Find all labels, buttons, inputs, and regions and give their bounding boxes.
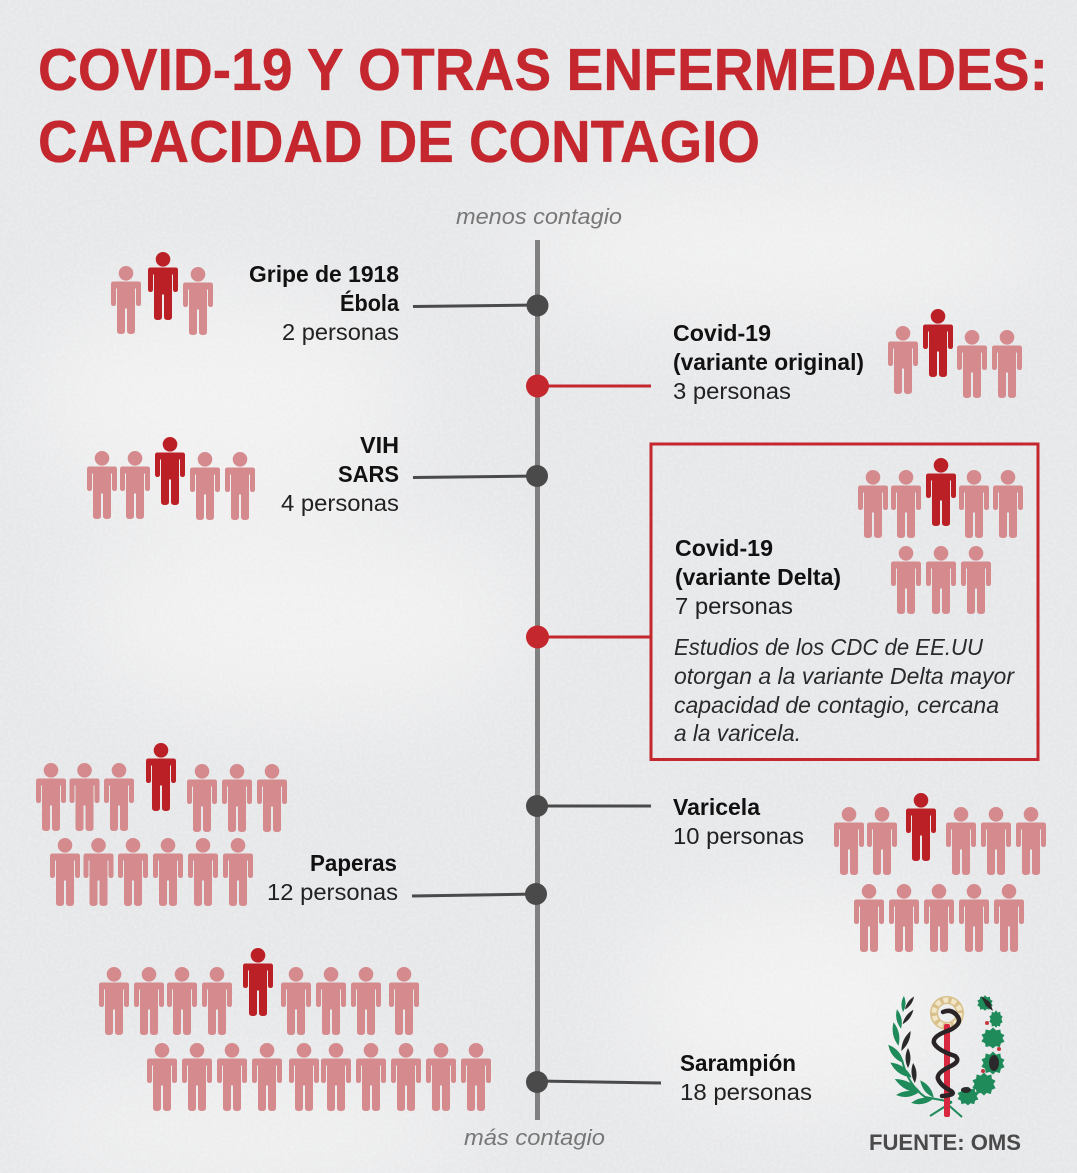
icons: 3 persons [888,309,1022,398]
icons: 18 persons [99,948,491,1111]
timeline axis [535,240,540,1120]
icons: 12 persons [36,743,287,906]
connector and node: Sarampión [526,1071,661,1093]
label: Covid-19 variante Delta: Covid-19 [675,535,773,561]
entry: Sarampión [99,948,812,1111]
label: Gripe de 1918 / Ébola: 2 personas [282,319,399,345]
label: Varicela [673,794,804,849]
icon: medical emblem [886,995,1005,1117]
connector and node: Gripe [413,294,548,316]
connector and node: Paperas [412,883,547,905]
icons: 2 persons [111,252,213,335]
label: Sarampión: Sarampión [680,1050,796,1076]
label: Covid-19 variante Delta [675,535,841,619]
label: Covid-19 variante original: 3 personas [673,378,791,404]
label: Covid-19 variante Delta: 7 personas [675,593,793,619]
icons: 10 persons [834,793,1046,952]
icons: 7 persons [858,458,1023,614]
label: Sarampión: 18 personas [680,1079,812,1105]
panel: Covid-19 variante Delta [526,444,1038,760]
connector and node: Delta [526,626,651,648]
label: VIH / SARS [281,432,399,516]
entry: Gripe de 1918 / Ébola [111,252,548,345]
connector and node: VIH [413,465,548,487]
label: VIH / SARS: SARS [338,461,399,487]
serpent [934,1011,959,1096]
connector and node: Varicela [526,795,651,817]
icons: 4 persons [87,437,255,520]
title: CAPACIDAD DE CONTAGIO [38,109,760,175]
connector and node: original [526,374,651,398]
label: Varicela: Varicela [673,794,760,820]
callout text: a la varicela. [674,720,801,746]
staff [944,1024,950,1117]
dark leaves [899,995,917,1083]
label: Sarampión [680,1050,812,1105]
callout text: otorgan a la variante Delta mayor [674,663,1015,689]
callout text: capacidad de contagio, cercana [674,692,999,718]
label: Paperas [267,850,398,905]
label: Varicela: 10 personas [673,823,804,849]
axis label: más contagio: más contagio [464,1125,605,1150]
label: VIH / SARS: 4 personas [281,490,399,516]
label: Gripe de 1918 / Ébola: Gripe de 1918 [249,261,399,287]
label: Covid-19 variante original: (variante original) [673,349,864,375]
source: FUENTE: OMS [869,1130,1021,1155]
entry: Paperas [36,743,547,906]
callout box [651,444,1038,760]
title [38,37,1048,175]
label: Paperas: Paperas [310,850,397,876]
holly dark accents and berries [961,996,1001,1093]
holly branch [958,995,1005,1105]
label: VIH / SARS: VIH [360,432,399,458]
entry: Covid-19 variante original [526,309,1022,404]
label: Covid-19 variante Delta: (variante Delta) [675,564,841,590]
label: Covid-19 variante original [673,320,864,404]
axis label: menos contagio: menos contagio [456,204,622,229]
label: Paperas: 12 personas [267,879,398,905]
label: Gripe de 1918 / Ébola [249,261,399,345]
entry: Varicela [526,793,1046,952]
laurel branch [886,996,962,1117]
callout text [674,634,1015,746]
golden ring [934,1000,960,1026]
label: Covid-19 variante original: Covid-19 [673,320,771,346]
label: Gripe de 1918 / Ébola: Ébola [340,289,399,316]
entry: VIH / SARS [87,432,548,520]
callout text: Estudios de los CDC de EE.UU [674,634,983,660]
